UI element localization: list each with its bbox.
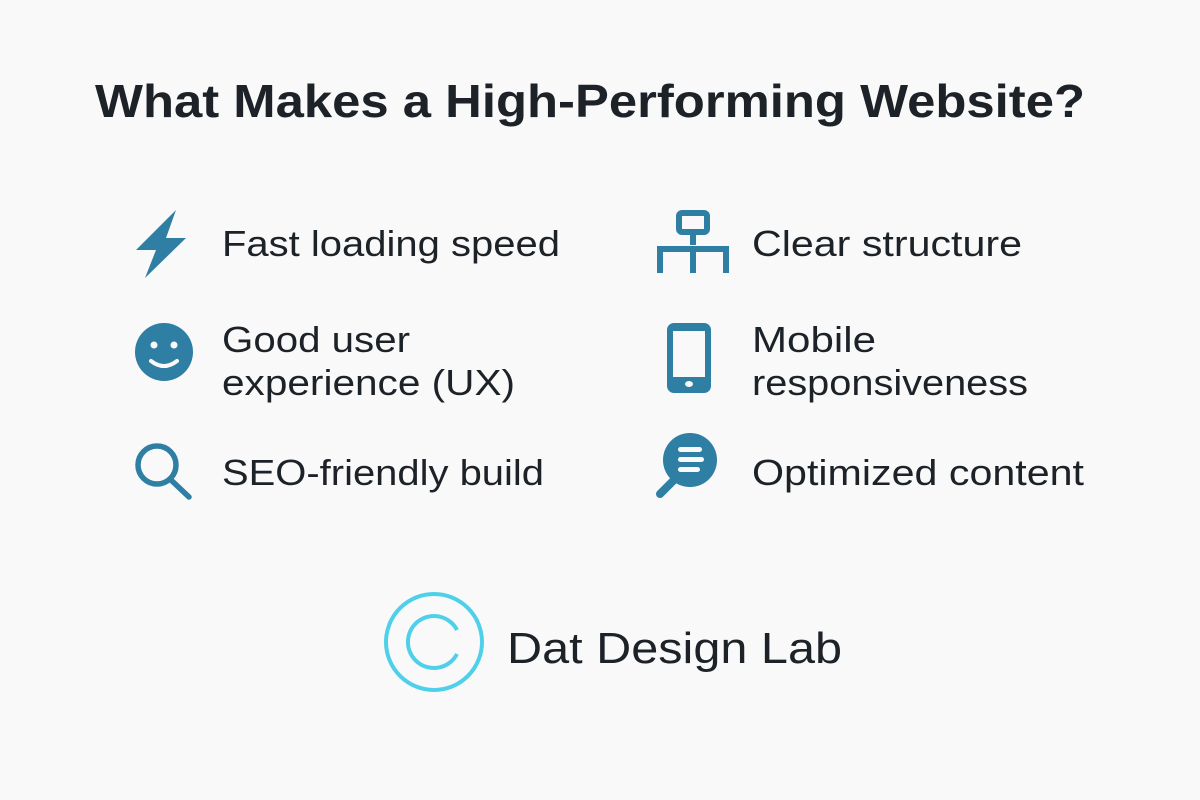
item: good user experience: experience (UX) [222,362,515,403]
logo: Dat Design Lab [507,624,842,673]
item: good user experience: Good user [222,319,410,360]
item: fast loading speed [136,210,560,278]
icon: logo rings [386,594,482,690]
item: optimized content [660,433,1084,494]
item: mobile responsiveness: responsiveness [752,362,1028,403]
item: good user experience [135,319,515,403]
item: optimized content: Optimized content [752,452,1084,493]
item: fast loading speed: Fast loading speed [222,223,560,264]
icon: smiley [135,323,193,381]
icon: sitemap [660,213,726,273]
item: mobile responsiveness [667,319,1028,403]
icon: magnifier [138,446,189,497]
icon: speech search [660,433,717,494]
item: mobile responsiveness: Mobile [752,319,876,360]
title: What Makes a High-Performing Website? [95,75,1085,127]
icon: lightning bolt [136,210,186,278]
item: seo-friendly build [138,446,544,497]
item: seo-friendly build: SEO-friendly build [222,452,544,493]
icon: phone [667,323,711,393]
item: clear structure [660,213,1022,273]
logo [386,594,842,690]
item: clear structure: Clear structure [752,223,1022,264]
